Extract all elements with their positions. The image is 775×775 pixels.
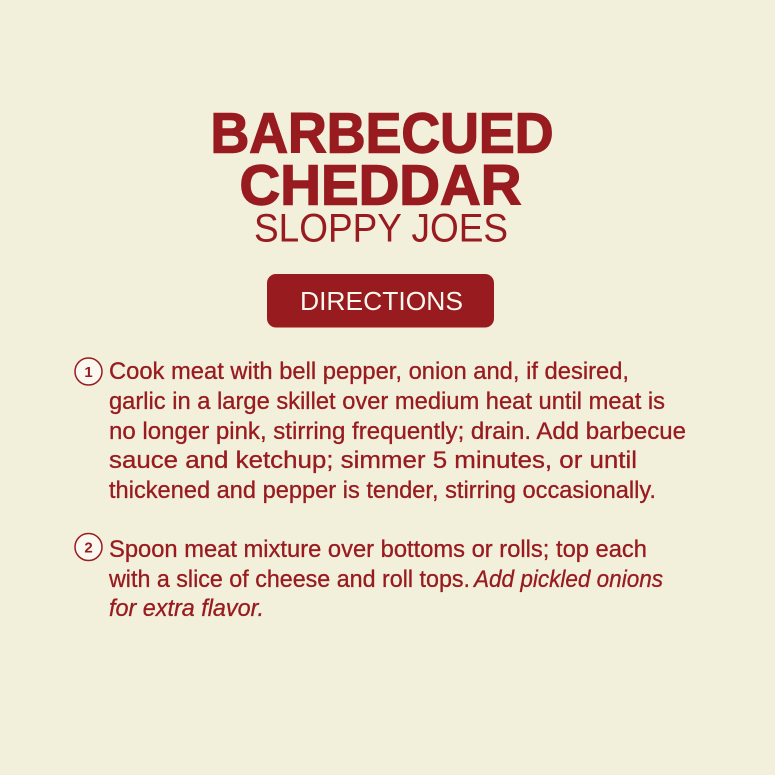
subtitle: SLOPPY JOES (254, 206, 508, 250)
step 2 text (108, 536, 663, 622)
step 1 text (109, 358, 686, 504)
icon: number 2 (75, 534, 102, 560)
directions label: DIRECTIONS (300, 286, 463, 316)
step 1 text: garlic in a large skillet over medium heat until meat is (109, 388, 665, 415)
title line: Cheddar: CHEDDAR (240, 154, 522, 218)
step 2 text: Add pickled onions (472, 566, 663, 593)
step 1 (75, 358, 686, 504)
title line: Barbecued: BARBECUED (210, 102, 554, 166)
directions badge (267, 274, 494, 328)
step 2 (75, 534, 663, 622)
title (210, 102, 554, 250)
step 2 text: Spoon meat mixture over bottoms or rolls; top each (109, 536, 647, 563)
icon: number 2: 2 (84, 540, 93, 556)
icon: number 1 (75, 358, 102, 385)
step 1 text: sauce and ketchup; simmer 5 minutes, or until (109, 447, 637, 474)
step 1 text: Cook meat with bell pepper, onion and, if desired, (109, 358, 629, 385)
step 2 text: for extra flavor. (109, 595, 264, 622)
step 2 text: with a slice of cheese and roll tops. (108, 566, 470, 593)
step 1 text: thickened and pepper is tender, stirring occasionally. (109, 477, 656, 504)
icon: number 1: 1 (84, 364, 93, 381)
step 1 text: no longer pink, stirring frequently; drain. Add barbecue (109, 418, 686, 445)
